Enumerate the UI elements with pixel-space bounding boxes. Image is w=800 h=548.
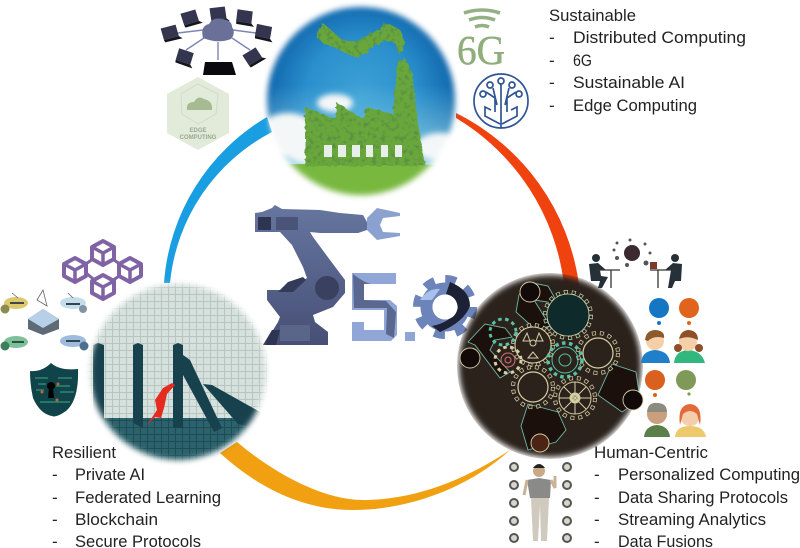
text block: resilient: - bbox=[52, 465, 58, 484]
central label: 5.0 bbox=[352, 273, 473, 341]
gears bbox=[490, 292, 618, 418]
icon: edge computing hexagon bbox=[167, 77, 229, 150]
icon: 6G: 6G bbox=[457, 27, 505, 73]
text block: human-centric: - bbox=[594, 488, 600, 507]
text block: sustainable: - bbox=[549, 51, 555, 70]
panel: resilient domino photo bbox=[86, 280, 270, 464]
text block: sustainable bbox=[549, 6, 746, 115]
clouds bbox=[258, 94, 464, 164]
ring arc: red bbox=[456, 113, 579, 285]
icon: collaboration at desks bbox=[589, 238, 682, 288]
icon: person with data icons bbox=[510, 463, 571, 542]
text block: sustainable: - bbox=[549, 28, 555, 47]
text block: resilient: Resilient bbox=[52, 443, 116, 462]
icon: users with interests bbox=[641, 298, 706, 437]
icon: security shield bbox=[30, 363, 78, 416]
text block: sustainable: 6G bbox=[573, 51, 592, 70]
icon: edge computing hexagon: COMPUTING bbox=[180, 135, 217, 141]
domino walls bbox=[93, 343, 262, 432]
text block: resilient: - bbox=[52, 510, 58, 529]
text block: sustainable: Sustainable AI bbox=[573, 73, 685, 92]
factory windows bbox=[324, 145, 402, 157]
gear of zero bbox=[417, 279, 473, 335]
text block: human-centric bbox=[594, 443, 800, 548]
green grass bbox=[286, 164, 435, 199]
text block: human-centric: - bbox=[594, 510, 600, 529]
icon: sustainable AI bbox=[474, 74, 528, 128]
team members seen from above bbox=[460, 282, 643, 452]
icon: blockchain cubes bbox=[64, 241, 141, 299]
text block: human-centric: - bbox=[594, 465, 600, 484]
text block: sustainable: - bbox=[549, 73, 555, 92]
text block: sustainable: - bbox=[549, 96, 555, 115]
panel: sustainable factory photo bbox=[262, 2, 460, 200]
text block: resilient bbox=[52, 443, 221, 548]
text block: human-centric: Personalized Computing bbox=[618, 465, 800, 484]
ring arc: blue bbox=[164, 117, 272, 283]
text block: sustainable: Distributed Computing bbox=[573, 28, 746, 47]
text block: resilient: Blockchain bbox=[75, 510, 158, 529]
text block: human-centric: Data Sharing Protocols bbox=[618, 488, 788, 507]
text block: human-centric: Human-Centric bbox=[594, 443, 708, 462]
icon: edge computing network bbox=[160, 6, 277, 75]
text block: sustainable: Sustainable bbox=[549, 6, 636, 25]
central robot arm bbox=[255, 205, 400, 345]
ring arc: orange bbox=[220, 442, 510, 510]
text block: human-centric: Streaming Analytics bbox=[618, 510, 766, 529]
panel: human-centric gears photo bbox=[457, 273, 643, 459]
text block: resilient: - bbox=[52, 488, 58, 507]
icon: edge computing hexagon: EDGE bbox=[189, 128, 207, 134]
factory made of leaves bbox=[305, 23, 425, 166]
text block: sustainable: Edge Computing bbox=[573, 96, 697, 115]
text block: resilient: Federated Learning bbox=[75, 488, 221, 507]
text block: resilient: Private AI bbox=[75, 465, 145, 484]
red figure pushing bbox=[147, 383, 175, 425]
icon: federated learning bbox=[0, 290, 88, 350]
